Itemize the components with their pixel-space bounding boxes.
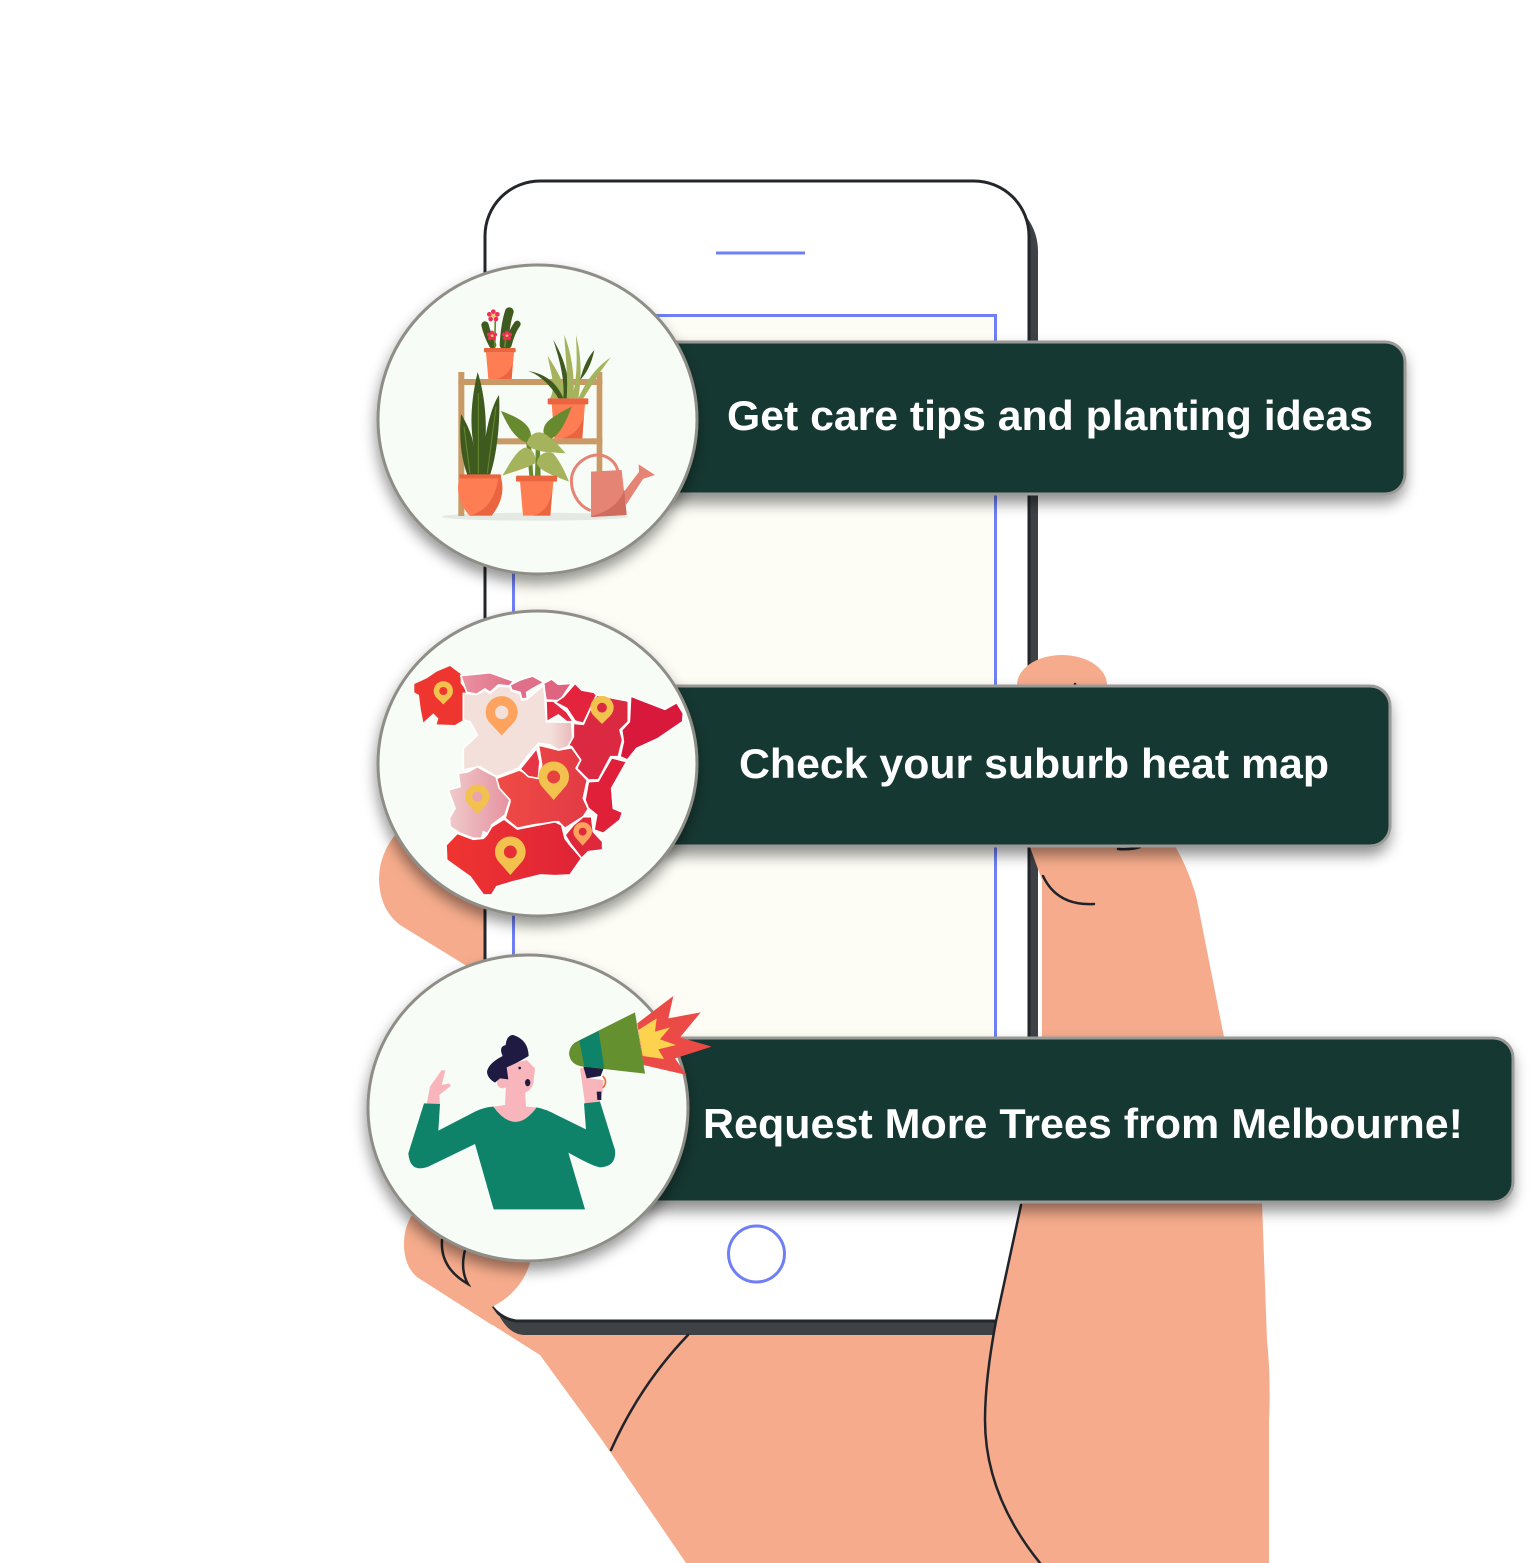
leafy plant pot bbox=[501, 407, 572, 516]
phone screen bbox=[514, 316, 996, 1196]
hand: front finger over the phone corner bbox=[404, 1215, 532, 1325]
hand: back of palm and fingers bbox=[379, 835, 1100, 1563]
bar: request trees bbox=[620, 1038, 1513, 1202]
hand: thumb and wrist bbox=[985, 655, 1270, 1563]
phone bbox=[485, 181, 1038, 1335]
phone home button bbox=[728, 1226, 784, 1282]
circle: heat map bbox=[378, 611, 697, 916]
circle: megaphone person bbox=[368, 955, 712, 1261]
burst bbox=[637, 996, 712, 1075]
watering can bbox=[571, 455, 655, 517]
label: heat map: Check your suburb heat map bbox=[739, 740, 1329, 787]
bar: heat map bbox=[620, 686, 1390, 846]
circle: plants bbox=[378, 265, 697, 574]
label: request trees: Request More Trees from Melbourne! bbox=[703, 1100, 1463, 1147]
label: care tips: Get care tips and planting ideas bbox=[727, 392, 1373, 439]
map pins bbox=[434, 681, 614, 875]
aloe pot bbox=[528, 335, 611, 438]
bar: care tips bbox=[620, 342, 1405, 494]
hair bbox=[487, 1035, 529, 1083]
map: regions of Spain bbox=[414, 666, 683, 895]
snake plant pot bbox=[458, 372, 502, 516]
skin bbox=[427, 1060, 603, 1122]
icon: person with megaphone bbox=[408, 996, 712, 1209]
sweater bbox=[408, 1102, 615, 1209]
hand creases bbox=[442, 684, 1140, 1563]
icon: plant shelf bbox=[442, 309, 655, 521]
flower pot bbox=[484, 309, 517, 379]
phone speaker bbox=[716, 252, 805, 254]
megaphone bbox=[583, 1067, 604, 1100]
